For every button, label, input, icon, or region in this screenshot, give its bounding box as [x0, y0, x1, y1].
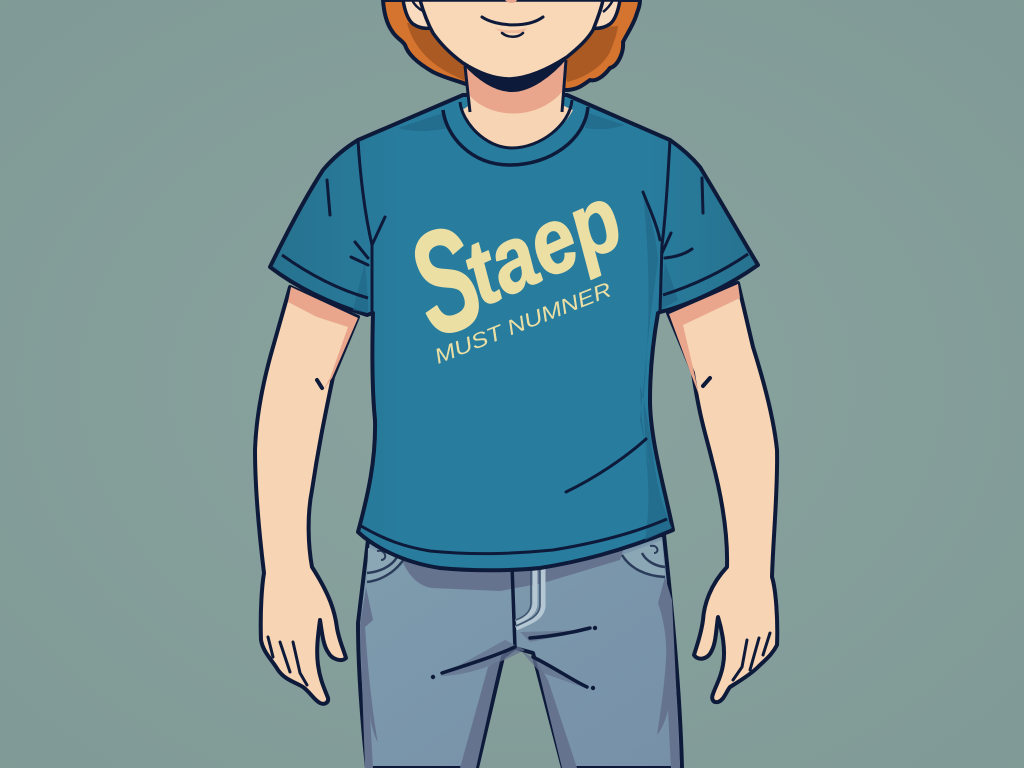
t-shirt: collar band [443, 107, 588, 165]
jeans [358, 535, 682, 768]
face: mouth [482, 17, 543, 25]
left arm and hand [255, 287, 358, 704]
shirt print: Staep: taep [449, 167, 636, 325]
left arm: sleeve shadow [288, 287, 358, 392]
hair [383, 0, 640, 90]
jeans: left pocket [367, 548, 404, 582]
right arm and hand [668, 283, 777, 702]
jeans: right pocket [622, 540, 665, 577]
jeans: side and inner-leg shadows [360, 577, 680, 768]
face: chin shadow [463, 57, 567, 91]
jeans: crease lines [431, 626, 597, 690]
t-shirt: hem [361, 519, 667, 554]
jeans: fly [512, 565, 543, 648]
t-shirt: sleeve seams [282, 254, 748, 298]
shirt print: Staep [389, 167, 636, 367]
face and ears [403, 0, 620, 91]
t-shirt: shaded folds [353, 113, 678, 540]
t-shirt: wrinkles [327, 178, 703, 265]
right arm: sleeve shadow [669, 284, 740, 395]
neck [460, 55, 573, 148]
shirt print: MUST NUMNER: MUST NUMNER [431, 278, 615, 369]
t-shirt [270, 95, 758, 570]
t-shirt: armhole lines [358, 140, 670, 312]
shirt print: Staep: S [389, 194, 501, 367]
jeans: waist shadow [400, 545, 625, 591]
t-shirt: belly fold [566, 439, 646, 492]
